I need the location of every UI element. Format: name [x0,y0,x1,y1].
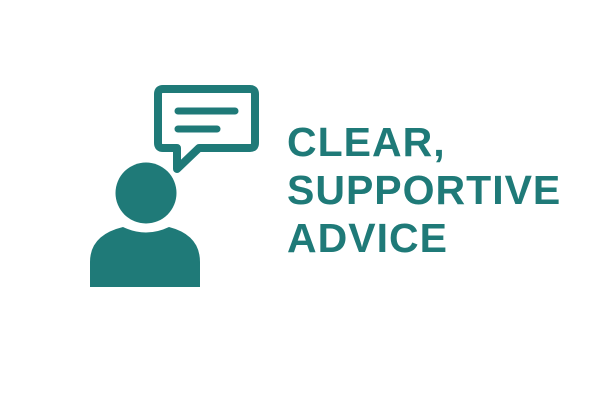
title: ADVICE [287,215,448,261]
title [287,119,561,261]
icon: speech bubble [158,89,255,169]
icon: person [90,162,200,287]
title: CLEAR, [287,119,446,165]
title: SUPPORTIVE [287,167,561,213]
